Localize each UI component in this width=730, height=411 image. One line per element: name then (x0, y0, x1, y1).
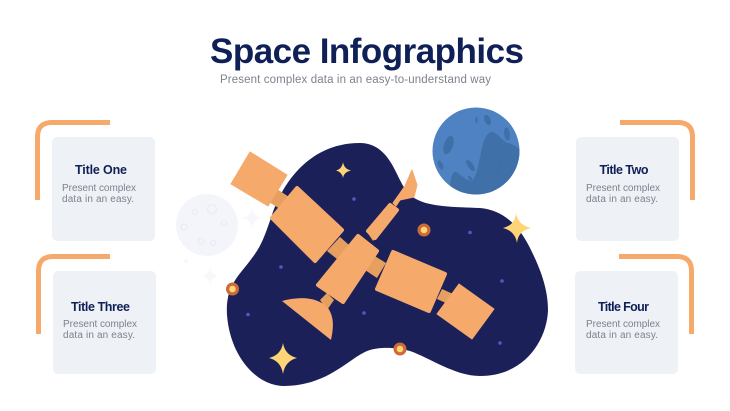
text: title one: Present complex (62, 183, 136, 194)
panel: title one (38, 122, 155, 241)
text: title two (586, 183, 660, 205)
icon: background dots (246, 197, 504, 345)
text: title four: data in an easy. (586, 330, 658, 341)
panel: title two (576, 122, 692, 241)
solar panels (231, 152, 494, 339)
space blob (227, 143, 548, 386)
heading: title two: Title Two (600, 163, 649, 177)
text: title three: data in an easy. (63, 330, 135, 341)
icon: yellow stars (269, 162, 531, 374)
text: title two: data in an easy. (586, 194, 658, 205)
subtitle: Present complex data in an easy-to-understand way (220, 74, 491, 86)
text: title four: Present complex (586, 319, 660, 330)
icon: pale moon (176, 194, 238, 256)
heading: title one: Title One (75, 163, 127, 177)
bracket: title two (620, 122, 692, 200)
text: title three (63, 319, 137, 341)
dish (282, 298, 333, 340)
card: title four (575, 271, 678, 374)
icon: blue planet (432, 108, 521, 200)
text: title one: data in an easy. (62, 194, 134, 205)
bracket: title three (38, 256, 110, 334)
panel: title four (575, 256, 692, 374)
text: title two: Present complex (586, 183, 660, 194)
text: title one (62, 183, 136, 205)
satellite (231, 152, 494, 340)
heading: title three: Title Three (71, 300, 130, 314)
text: title four (586, 319, 660, 341)
heading: title four: Title Four (598, 300, 649, 314)
card: title two (576, 137, 679, 241)
title: Space Infographics (210, 32, 524, 71)
card: title one (52, 137, 155, 241)
text: title three: Present complex (63, 319, 137, 330)
icon: orbs (226, 224, 430, 356)
card: title three (53, 271, 156, 374)
bracket: title four (619, 256, 692, 334)
panel: title three (38, 256, 156, 374)
bracket: title one (38, 122, 110, 200)
icon: faint stars (184, 207, 263, 285)
connectors (269, 189, 453, 310)
